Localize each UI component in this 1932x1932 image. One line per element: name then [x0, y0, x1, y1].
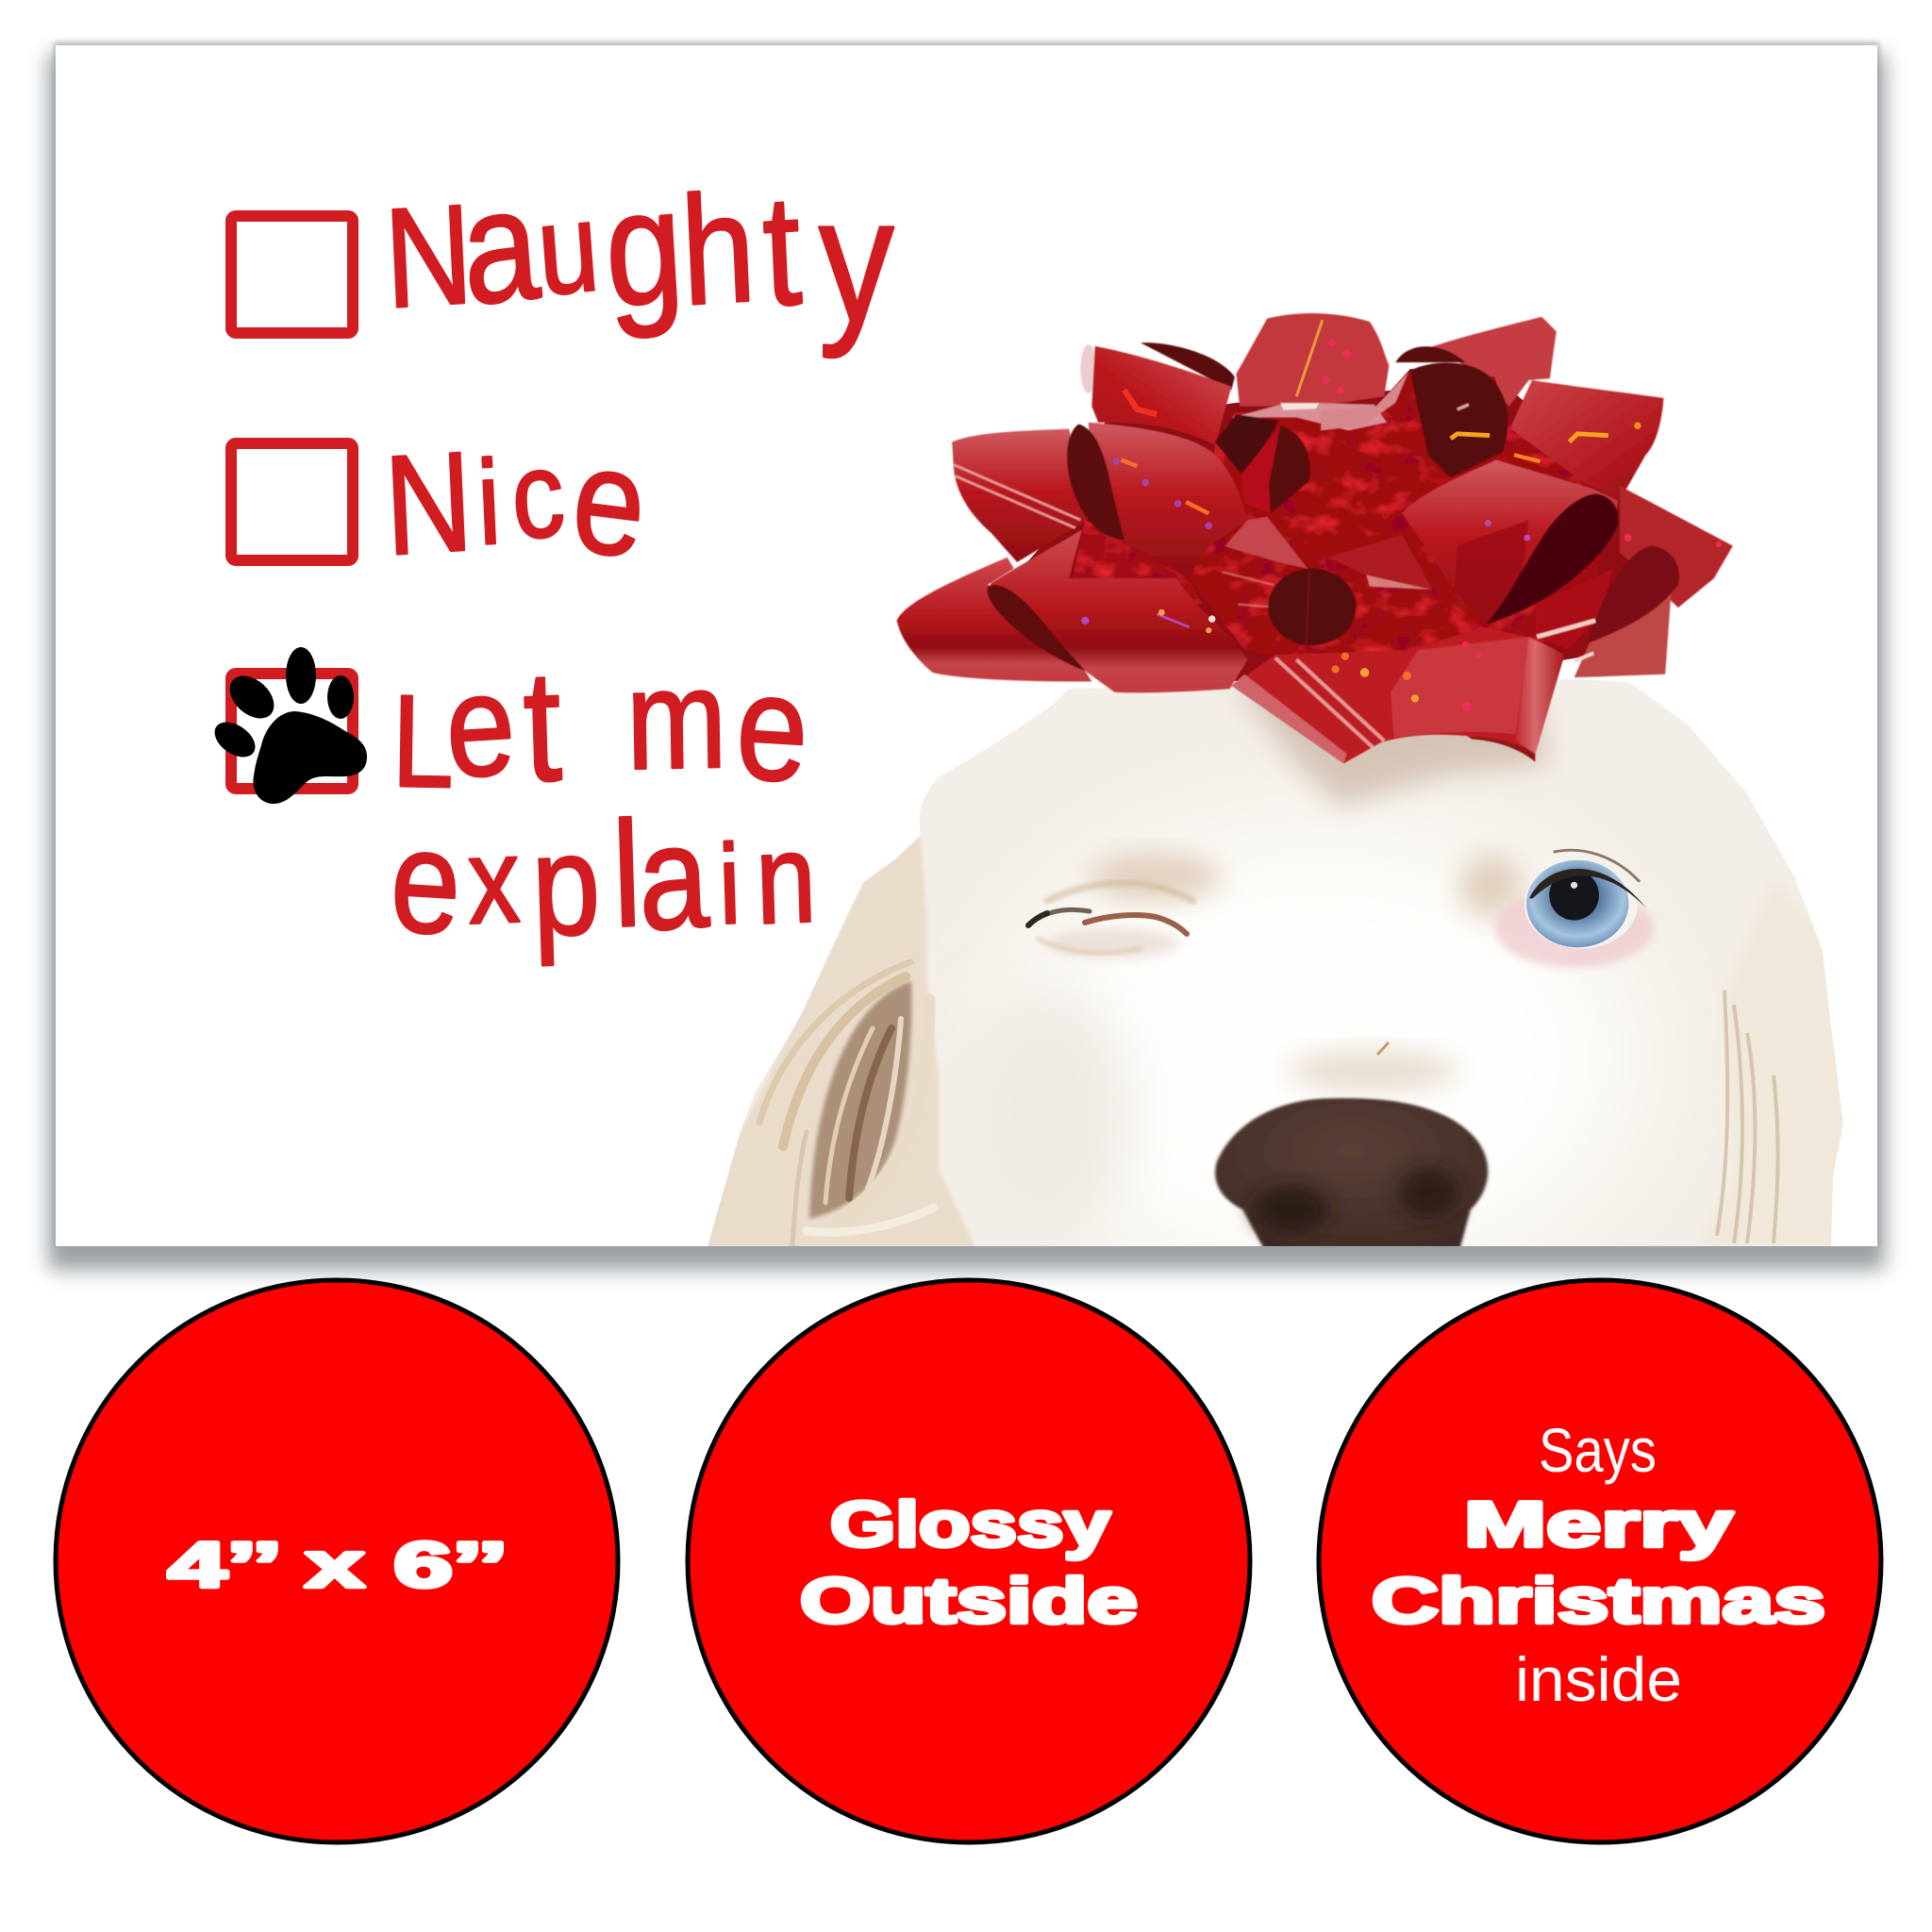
- checkbox: naughty: [231, 216, 353, 333]
- holographic core: [1190, 369, 1608, 670]
- label: Let me: m: [625, 640, 727, 799]
- open blue eye: [1494, 850, 1654, 968]
- left ear: [698, 835, 979, 1255]
- face highlight: [1000, 821, 1641, 1292]
- badge: finish: Glossy: [830, 1489, 1110, 1560]
- bottom centre petal: [1231, 627, 1564, 763]
- badge: size: [56, 1280, 618, 1842]
- label: Naughty: u: [533, 175, 603, 323]
- label: Let me: t: [521, 638, 563, 816]
- right ear: [1706, 887, 1843, 1245]
- badge: message: Merry: [1464, 1489, 1733, 1560]
- bow base silhouette: [1026, 391, 1629, 681]
- badge: message: Christmas: [1372, 1565, 1825, 1637]
- badge: size: 4’’ x 6’’: [168, 1529, 508, 1601]
- small fleck: [1377, 1042, 1389, 1055]
- checkbox: let me explain: [231, 674, 353, 789]
- label: Let me: e: [442, 643, 518, 808]
- badge: message: [1319, 1280, 1881, 1842]
- red gift bow: [897, 313, 1733, 763]
- label: explain: a: [635, 792, 712, 961]
- winking eye: [1028, 883, 1193, 953]
- label: Naughty: t: [759, 161, 805, 340]
- badge: finish: Outside: [800, 1565, 1138, 1637]
- lower-left front petal: [988, 529, 1248, 692]
- label: explain: i: [717, 820, 742, 948]
- label: Naughty: N: [382, 175, 475, 338]
- label: Nice: c: [507, 424, 569, 566]
- badge: message: inside: [1515, 1644, 1682, 1714]
- label: Naughty: g: [600, 154, 688, 342]
- shadow under bow: [1236, 684, 1547, 807]
- photo: white dog with red bow: [698, 313, 1849, 1292]
- holographic specks: [1081, 320, 1722, 712]
- label: Nice: i: [475, 434, 503, 570]
- label: explain: n: [754, 807, 818, 951]
- label: Nice: N: [382, 423, 475, 585]
- label: Let me: e: [733, 642, 812, 814]
- label: explain: p: [529, 803, 603, 967]
- back ribbon petals: [897, 313, 1733, 682]
- label: Naughty: y: [819, 160, 894, 358]
- panel: greeting card: [56, 45, 1877, 1246]
- label: Nice: e: [566, 414, 652, 591]
- brow tints: [1090, 853, 1222, 902]
- label: explain: x: [466, 813, 522, 950]
- badge: message: Says: [1539, 1415, 1657, 1485]
- badge: finish: [688, 1280, 1250, 1842]
- nose: [1215, 1098, 1488, 1248]
- centre ball: [1222, 517, 1433, 645]
- label: Let me: L: [391, 668, 455, 816]
- checkbox: nice: [231, 443, 353, 560]
- top knot: [1215, 362, 1507, 513]
- centre-left petal: [1067, 423, 1248, 578]
- label: Naughty: a: [456, 154, 545, 339]
- label: explain: e: [388, 797, 464, 966]
- dog head: [698, 679, 1849, 1292]
- right centre petal: [1402, 459, 1679, 661]
- label: Naughty: h: [677, 161, 758, 339]
- label: explain: l: [610, 791, 643, 958]
- icon: black paw print: [208, 647, 367, 804]
